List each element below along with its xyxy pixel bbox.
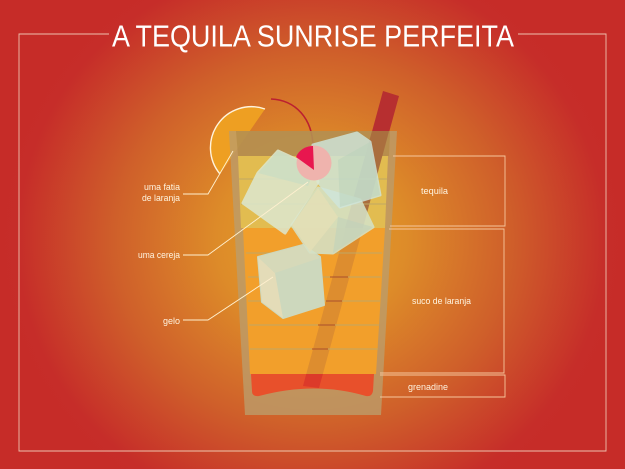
label: orange slice: de laranja — [142, 193, 181, 204]
label: cherry: uma cereja — [138, 250, 181, 261]
title: A TEQUILA SUNRISE PERFEITA — [112, 18, 514, 54]
label: orange slice: uma fatia — [144, 182, 181, 193]
bracket: tequila — [390, 156, 505, 226]
label: orange slice — [142, 182, 181, 204]
ice cube: lower — [258, 245, 324, 318]
leader lines — [183, 151, 308, 320]
cherry — [296, 146, 332, 180]
label: tequila: tequila — [421, 186, 449, 197]
ice cube: top left — [243, 151, 318, 233]
liquid: grenadine — [251, 374, 374, 396]
straw — [303, 91, 399, 388]
label: ice: gelo — [163, 316, 180, 327]
label: grenadine: grenadine — [408, 382, 448, 393]
icon: orange slice — [210, 107, 265, 174]
measure lines — [239, 179, 387, 349]
bracket: orange juice — [380, 229, 504, 373]
straw inside drink — [303, 131, 389, 388]
liquid: orange juice — [243, 228, 385, 374]
ice cube: top right — [313, 133, 380, 207]
bracket: grenadine — [380, 375, 505, 397]
liquid: tequila — [238, 156, 388, 228]
ice cube: middle — [292, 188, 373, 253]
cherry stem — [271, 99, 313, 148]
glass — [229, 131, 397, 415]
label: orange juice: suco de laranja — [412, 296, 472, 307]
